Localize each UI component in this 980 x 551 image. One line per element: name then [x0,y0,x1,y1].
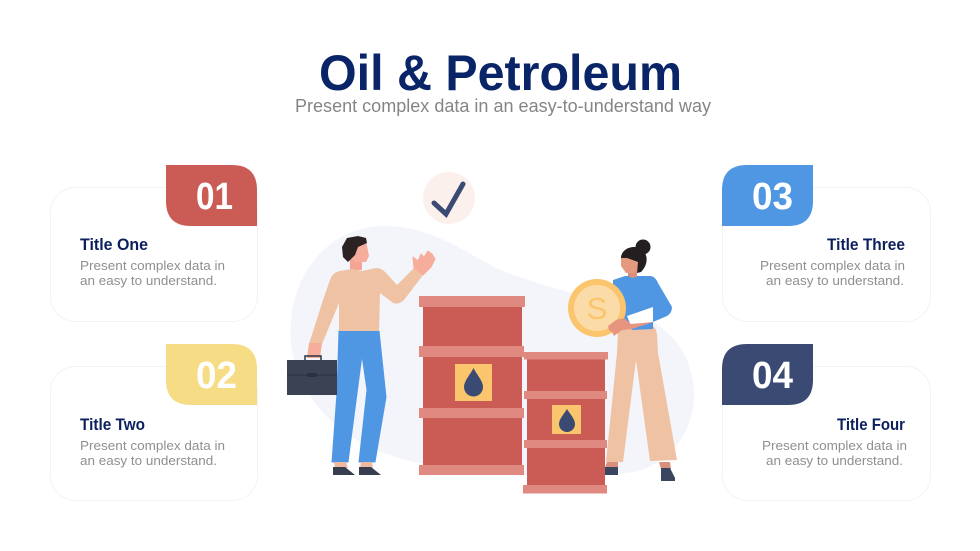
heading: title four: Title Four [837,416,906,434]
text block three: an easy to understand. [766,273,904,288]
text block three [760,258,905,288]
illustration: oil and petroleum scene [287,172,694,494]
text block two: Present complex data in [80,438,225,453]
text block four: Present complex data in [762,438,907,453]
badge 01 [166,165,257,226]
label: oil drop small [552,405,581,434]
number 02: 02 [196,355,237,397]
number 01: 01 [196,176,233,218]
title: Oil & Petroleum [319,45,682,101]
woman shoes and ankles [605,462,671,469]
small oil barrel [523,352,608,494]
woman trousers [606,326,677,462]
man neck and face [350,258,362,270]
man lower hand [307,343,322,358]
icon: coin [568,279,626,337]
badge 04 [722,344,813,405]
woman shirt [613,276,672,330]
text block four: an easy to understand. [766,453,903,468]
heading: title one: Title One [80,236,148,254]
panel: card three [722,165,930,322]
panel: card four [722,344,930,500]
large oil barrel [419,296,525,475]
text block four [762,438,907,468]
number 03: 03 [752,176,793,218]
man waving hand [413,251,435,275]
text block two [80,438,225,468]
text block three: Present complex data in [760,258,905,273]
panel: card one [50,165,258,322]
background blob [290,226,694,475]
text block one: an easy to understand. [80,273,217,288]
icon: check badge [423,172,475,224]
paper [627,307,653,326]
label: oil drop large [455,364,492,401]
man with briefcase [287,236,435,475]
woman hair [621,247,647,273]
panel: card two [50,344,258,500]
woman neck and face [628,270,637,278]
icon: briefcase [287,356,337,395]
text block two: an easy to understand. [80,453,217,468]
text block one: Present complex data in [80,258,225,273]
subtitle: Present complex data in an easy-to-understand way [295,96,711,116]
icon: coin: S [587,291,607,326]
woman hand [608,318,653,336]
number 04: 04 [752,355,793,397]
text block one [80,258,225,288]
badge 02 [166,344,257,405]
man legs [332,331,386,462]
heading: title two: Title Two [80,416,145,434]
badge 03 [722,165,813,226]
man sweater [309,267,423,344]
woman holding coin [568,240,677,481]
heading: title three: Title Three [827,236,905,254]
